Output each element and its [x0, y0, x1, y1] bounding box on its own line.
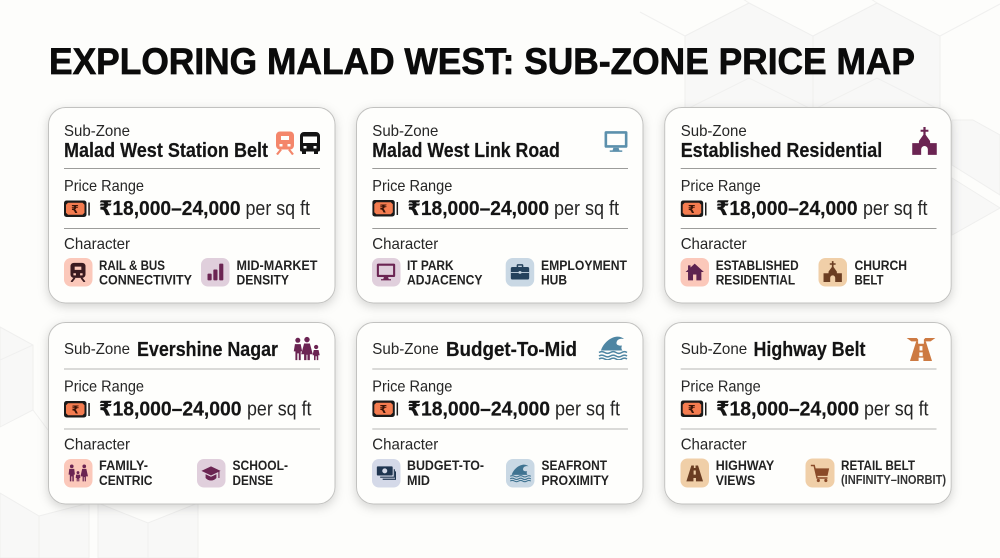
icon: rupee note	[372, 400, 398, 417]
character label: Character	[681, 236, 747, 253]
sub-zone heading	[681, 123, 882, 162]
icon: rupee note: ₹	[379, 404, 387, 416]
price value	[408, 198, 619, 220]
chip: church belt	[818, 258, 907, 288]
price value: per sq ft	[864, 398, 929, 420]
chip: budget-to-mid: MID	[407, 473, 430, 488]
chip: IT park adjacency	[372, 258, 482, 288]
sub-zone heading: Established Residential	[681, 140, 882, 162]
chip: seafront proximity: SEAFRONT	[542, 458, 608, 473]
sub-zone heading: Sub-Zone	[681, 341, 747, 358]
sub-zone heading: Sub-Zone	[64, 341, 130, 358]
price range label: Price Range	[681, 178, 761, 195]
price value	[408, 398, 620, 420]
price value: per sq ft	[554, 198, 619, 220]
panel: Malad West Link Road	[356, 108, 643, 303]
panel: Evershine Nagar	[48, 322, 335, 504]
chip: highway views: VIEWS	[716, 473, 755, 488]
title: EXPLORING MALAD WEST: SUB-ZONE PRICE MAP	[49, 41, 915, 82]
chip: school-dense	[197, 458, 288, 488]
sub-zone heading: Sub-Zone	[681, 123, 747, 140]
chip: established residential: ESTABLISHED	[716, 258, 799, 273]
chip: employment hub: HUB	[541, 272, 567, 288]
chip: mid-market density	[201, 258, 318, 288]
sub-zone heading	[372, 123, 560, 162]
icon: rupee note	[64, 401, 90, 418]
price value: per sq ft	[555, 398, 620, 420]
icon: rupee note	[372, 200, 398, 216]
panel: Highway Belt	[665, 322, 951, 504]
icon: rupee note: ₹	[379, 204, 387, 216]
icon: rupee note: ₹	[688, 204, 696, 216]
chip: IT park adjacency: ADJACENCY	[407, 272, 482, 288]
chip: established residential: RESIDENTIAL	[716, 272, 795, 288]
chip: family-centric: CENTRIC	[99, 473, 153, 488]
icon: rupee note	[64, 200, 90, 217]
icon: church	[912, 127, 937, 155]
icon: rupee note: ₹	[71, 204, 79, 216]
icon: rupee note	[681, 200, 706, 217]
price range label: Price Range	[681, 378, 761, 396]
sub-zone heading	[372, 339, 577, 361]
icon: wave	[599, 337, 627, 360]
price value	[99, 398, 312, 420]
chip: budget-to-mid	[372, 458, 484, 488]
chip: employment hub	[506, 258, 628, 288]
sub-zone heading	[681, 339, 866, 361]
chip: family-centric: FAMILY-	[99, 458, 148, 473]
sub-zone heading	[64, 339, 278, 361]
chip: retail belt	[806, 458, 946, 488]
price value: per sq ft	[247, 398, 312, 420]
price range label: Price Range	[372, 178, 452, 195]
chip: church belt: BELT	[854, 272, 884, 288]
chip: retail belt: RETAIL BELT	[841, 458, 916, 473]
chip: highway views	[680, 458, 774, 488]
price value	[99, 198, 310, 220]
chip: established residential	[680, 258, 799, 288]
price value: ₹18,000–24,000	[716, 398, 859, 420]
chip: rail and bus connectivity: CONNECTIVITY	[99, 272, 192, 288]
chip: mid-market density: DENSITY	[236, 272, 289, 288]
character label: Character	[372, 236, 439, 253]
sub-zone heading: Malad West Station Belt	[64, 140, 268, 162]
price value: ₹18,000–24,000	[408, 398, 550, 420]
sub-zone heading: Highway Belt	[754, 339, 866, 361]
price value	[716, 398, 929, 420]
icon: train and bus	[276, 132, 320, 154]
price value: ₹18,000–24,000	[716, 198, 858, 220]
sub-zone heading: Evershine Nagar	[137, 339, 278, 361]
sub-zone heading: Malad West Link Road	[372, 140, 560, 162]
sub-zone heading: Budget-To-Mid	[446, 339, 577, 361]
chip: family-centric	[64, 458, 153, 488]
character label: Character	[681, 436, 747, 454]
price range label: Price Range	[64, 178, 144, 195]
icon: monitor	[605, 131, 627, 152]
chip: budget-to-mid: BUDGET-TO-	[407, 458, 484, 473]
sub-zone heading: Sub-Zone	[372, 341, 439, 358]
price value: per sq ft	[246, 198, 310, 220]
icon: highway	[907, 338, 935, 361]
chip: retail belt: (INFINITY–INORBIT)	[841, 473, 946, 487]
panel: Malad West Station Belt	[48, 108, 335, 303]
chip: church belt: CHURCH	[854, 258, 907, 273]
panel: Established Residential	[665, 108, 951, 303]
price range label: Price Range	[64, 378, 144, 396]
chip: seafront proximity	[506, 458, 609, 488]
chip: rail and bus connectivity	[64, 258, 192, 288]
chip: IT park adjacency: IT PARK	[407, 258, 454, 273]
chip: employment hub: EMPLOYMENT	[541, 258, 628, 273]
sub-zone heading: Sub-Zone	[372, 123, 438, 140]
chip: school-dense: SCHOOL-	[232, 458, 288, 473]
icon: rupee note: ₹	[688, 404, 696, 416]
character label: Character	[64, 236, 131, 253]
price range label: Price Range	[372, 378, 452, 396]
icon: rupee note	[681, 400, 706, 417]
chip: seafront proximity: PROXIMITY	[542, 473, 609, 488]
price value: ₹18,000–24,000	[408, 198, 549, 220]
character label: Character	[372, 436, 439, 454]
panel: Budget-To-Mid	[356, 322, 643, 504]
sub-zone heading: Sub-Zone	[64, 123, 130, 140]
icon: rupee note: ₹	[72, 404, 80, 416]
price value: ₹18,000–24,000	[99, 198, 240, 220]
character label: Character	[64, 436, 131, 454]
price value	[716, 198, 928, 220]
icon: family	[294, 337, 320, 360]
chip: mid-market density: MID-MARKET	[236, 258, 318, 273]
sub-zone heading	[64, 123, 268, 162]
price value: ₹18,000–24,000	[99, 398, 242, 420]
chip: highway views: HIGHWAY	[716, 458, 774, 473]
price value: per sq ft	[863, 198, 928, 220]
chip: rail and bus connectivity: RAIL & BUS	[99, 258, 165, 273]
chip: school-dense: DENSE	[232, 473, 273, 488]
